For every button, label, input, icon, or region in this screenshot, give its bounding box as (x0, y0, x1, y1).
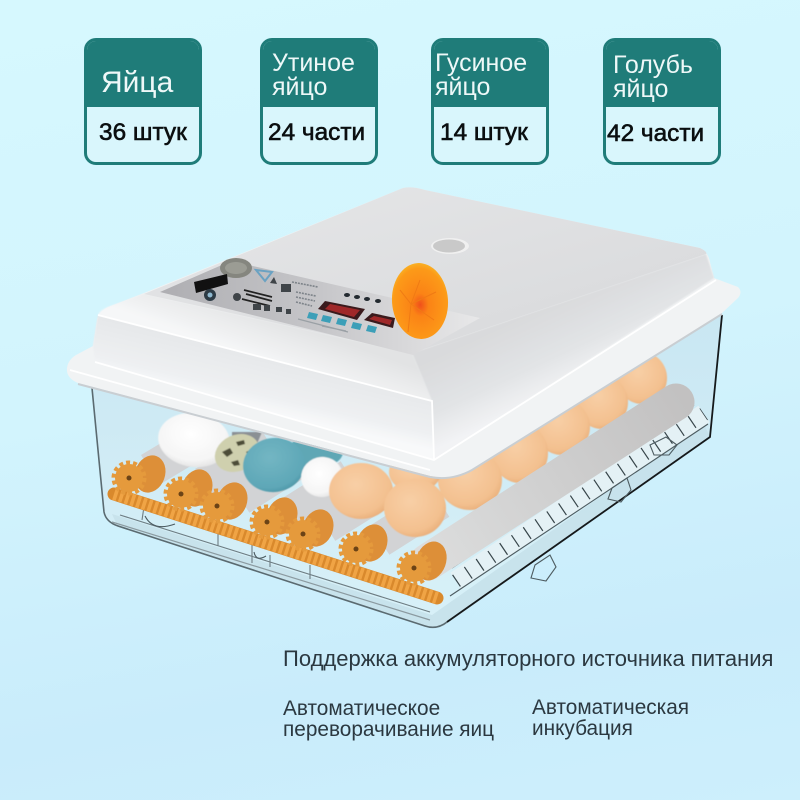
card header (431, 38, 549, 107)
vent button (431, 238, 469, 254)
eggs (155, 352, 667, 537)
card: duck eggs (260, 38, 378, 165)
front long roller (428, 402, 676, 562)
blue buttons (307, 312, 377, 333)
card header: Утиное (272, 49, 355, 77)
card header: Яйца (101, 66, 173, 99)
dark gap behind eggs (232, 432, 262, 446)
lid front right face (412, 254, 714, 460)
card: pigeon eggs (603, 38, 721, 165)
lid front left face (93, 315, 434, 460)
gauge (220, 258, 252, 278)
lid rim (67, 187, 740, 478)
card count: 36 штук (99, 119, 187, 146)
rack bar (114, 494, 437, 598)
card header: яйцо (435, 73, 490, 101)
white goose egg (155, 408, 233, 472)
quail egg (209, 427, 265, 479)
card count: 42 части (607, 120, 704, 147)
card header (84, 38, 202, 107)
control panel (160, 258, 480, 355)
teal egg (240, 434, 308, 496)
black switch (194, 274, 228, 293)
caption: automatic egg turning: переворачивание яиц (283, 718, 494, 741)
card header (260, 38, 378, 107)
transparent tray (92, 300, 722, 628)
card header: Голубь (613, 51, 693, 79)
card header: Гусиное (435, 49, 527, 77)
small labels (292, 282, 318, 306)
lid (67, 187, 740, 478)
caption: automatic incubation: Автоматическая (532, 696, 689, 719)
egg rack grid (120, 405, 708, 612)
gears (114, 462, 430, 584)
icons and lines (242, 290, 272, 306)
caption: automatic egg turning: Автоматическое (283, 697, 440, 720)
card header: яйцо (613, 75, 668, 103)
caption: automatic incubation: инкубация (532, 717, 633, 740)
tan eggs row (329, 352, 667, 537)
orange candled egg (389, 261, 451, 341)
second teal egg (287, 436, 343, 468)
lid highlights (70, 280, 716, 470)
rollers (150, 440, 440, 540)
panel caption (298, 319, 348, 332)
caption: battery support: Поддержка аккумуляторного источника питания (283, 646, 773, 671)
round knob (204, 289, 216, 301)
caption: automatic incubation (532, 696, 689, 740)
caption: automatic egg turning (283, 697, 494, 741)
card count: 14 штук (440, 119, 528, 146)
indicator leds (344, 293, 381, 303)
card count: 24 части (268, 119, 365, 146)
card header: яйцо (272, 73, 327, 101)
logo (256, 270, 272, 281)
lid top face (144, 187, 706, 353)
card: goose eggs (431, 38, 549, 165)
card: eggs (84, 38, 202, 165)
card header (603, 38, 721, 107)
lid chamfer left (98, 294, 432, 401)
small white egg (297, 452, 347, 502)
red displays (318, 301, 395, 328)
orange roller caps (129, 451, 452, 585)
